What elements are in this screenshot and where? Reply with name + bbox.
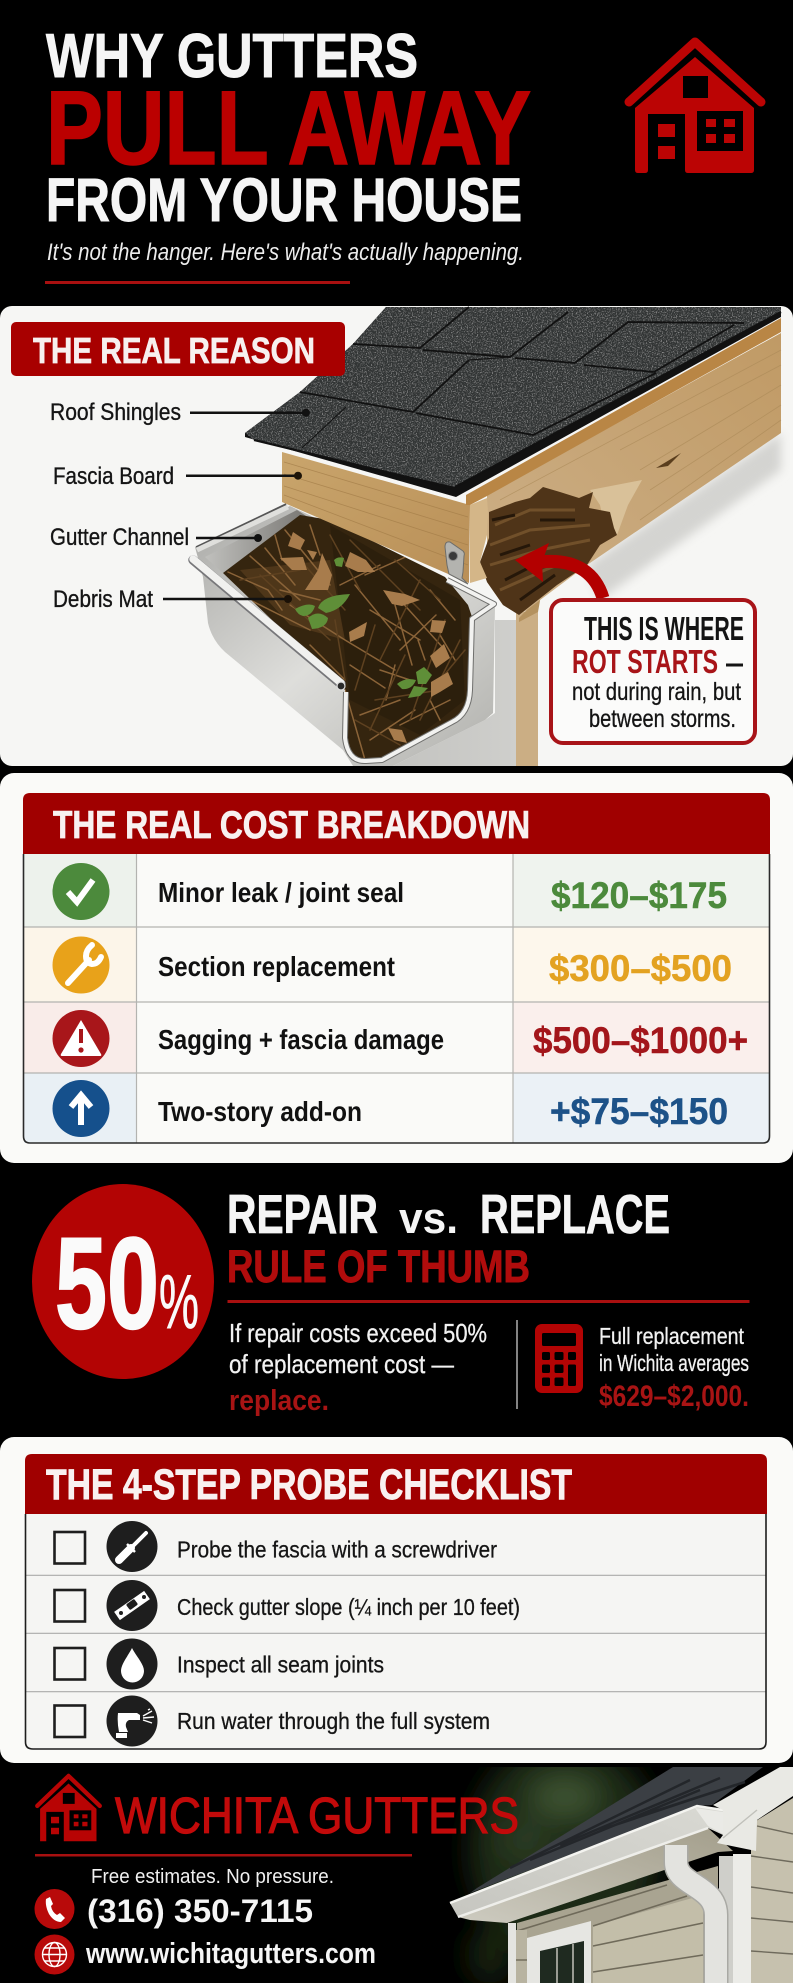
icon: phone [34, 1889, 74, 1929]
accent rule [228, 1300, 750, 1303]
table heading [23, 793, 770, 854]
header panel [45, 22, 761, 284]
end profile [345, 580, 494, 761]
icon: water drop [106, 1638, 158, 1690]
row: minor leak [52, 863, 727, 920]
tagline: Free estimates. No pressure. [91, 1866, 334, 1888]
brand name: WICHITA GUTTERS [115, 1787, 519, 1844]
end grain [470, 498, 488, 583]
callout: ROT STARTS [572, 643, 718, 680]
heading: the real reason: THE REAL REASON [33, 330, 315, 371]
heading: repair vs replace [227, 1184, 670, 1245]
panel: cost breakdown [0, 773, 793, 1163]
footer [34, 1767, 793, 1983]
icon: calculator [535, 1324, 583, 1393]
right siding [751, 1798, 793, 1983]
post [508, 1923, 516, 1983]
label: debris mat [53, 586, 292, 613]
wall shadow [587, 433, 781, 600]
soffit [458, 1828, 733, 1923]
wall and post [393, 595, 541, 766]
panel: the real reason [0, 306, 793, 766]
heading: the real reason [11, 322, 345, 376]
illustration: roof shingles [245, 307, 781, 497]
panel: probe checklist [0, 1437, 793, 1763]
red arrow [515, 543, 603, 598]
row: two-story: Two-story add-on [158, 1096, 362, 1127]
replacement cost text: $629–$2,000. [599, 1380, 749, 1413]
tagline: It's not the hanger. Here's what's actually happening. [47, 239, 524, 266]
label: fascia board: Fascia Board [53, 463, 174, 490]
accent rule [35, 1854, 412, 1856]
illustration: fascia board [282, 318, 781, 615]
leaves [295, 557, 432, 698]
photo: house with gutter [450, 1767, 793, 1983]
row: sagging: $500–$1000+ [533, 1020, 748, 1061]
labels [50, 399, 310, 613]
roof [470, 1767, 763, 1893]
bracket [445, 542, 468, 584]
step 1 [54, 1521, 497, 1572]
title [46, 22, 531, 235]
row: sagging: Sagging + fascia damage [158, 1024, 444, 1055]
panel: repair vs replace [32, 1184, 750, 1417]
icon: warning [52, 1010, 110, 1067]
label: gutter channel: Gutter Channel [50, 524, 189, 551]
back rim [197, 506, 287, 549]
logo: house [37, 1776, 100, 1841]
heading: repair vs replace: vs. [399, 1194, 458, 1243]
title: WHY GUTTERS [46, 22, 418, 91]
step 3: Inspect all seam joints [177, 1652, 384, 1678]
badge: 50 percent: % [159, 1260, 199, 1345]
icon: red house [629, 42, 761, 173]
badge: 50 percent [32, 1184, 214, 1379]
top strip [466, 318, 781, 505]
label: debris mat: Debris Mat [53, 586, 153, 613]
gutter [450, 1806, 723, 1917]
icon: check [52, 863, 110, 920]
rot damage [480, 487, 617, 615]
callout [551, 600, 755, 743]
row: section replacement: $300–$500 [549, 948, 732, 989]
chipped wood [590, 480, 642, 535]
phone: (316) 350-7115 [87, 1893, 313, 1929]
step 1: Probe the fascia with a screwdriver [177, 1536, 497, 1562]
step 4: Run water through the full system [177, 1708, 490, 1734]
label: fascia board [53, 463, 302, 490]
corner trim [719, 1856, 733, 1983]
front rim [193, 560, 341, 684]
title: FROM YOUR HOUSE [46, 166, 522, 235]
replacement cost text [599, 1323, 749, 1413]
accent rule [45, 281, 350, 284]
callout: between storms. [589, 705, 736, 733]
icon: globe [34, 1934, 74, 1974]
downspout [676, 1845, 716, 1983]
step 3 [54, 1638, 384, 1690]
rule text: replace. [229, 1385, 329, 1417]
label: roof shingles [50, 399, 310, 426]
row: minor leak: Minor leak / joint seal [158, 877, 404, 908]
rule text: If repair costs exceed 50% [229, 1318, 487, 1348]
window [527, 1921, 591, 1983]
icon: screwdriver [106, 1521, 158, 1572]
table grid [26, 1514, 766, 1749]
icon: up arrow [52, 1080, 110, 1137]
step 2: Check gutter slope (¼ inch per 10 feet) [177, 1594, 520, 1620]
step 2 [54, 1580, 520, 1631]
row: section replacement: Section replacement [158, 951, 395, 982]
website: www.wichitagutters.com [85, 1938, 376, 1970]
row backgrounds [24, 854, 770, 1143]
icon: hose nozzle [106, 1696, 158, 1746]
illustration: gutter [193, 506, 495, 766]
icon: wrench [52, 936, 110, 994]
title: PULL AWAY [46, 70, 531, 187]
label: roof shingles: Roof Shingles [50, 399, 181, 426]
row: two-story [52, 1080, 728, 1137]
rule text: of replacement cost — [229, 1349, 454, 1379]
row: minor leak: $120–$175 [551, 875, 727, 916]
rule text [229, 1318, 487, 1417]
table heading: THE 4-STEP PROBE CHECKLIST [46, 1461, 572, 1509]
row: sagging [52, 1010, 748, 1067]
replacement cost text: Full replacement [599, 1323, 745, 1349]
siding [517, 1866, 718, 1983]
heading: repair vs replace: REPLACE [480, 1184, 670, 1245]
row: section replacement [52, 936, 732, 994]
debris mat [223, 515, 472, 760]
callout: — [726, 647, 743, 680]
step 4 [54, 1696, 490, 1746]
badge: 50 percent: 50 [55, 1210, 159, 1356]
row: two-story: +$75–$150 [550, 1091, 728, 1132]
subheading: rule of thumb: RULE OF THUMB [227, 1241, 530, 1292]
table grid [23, 854, 770, 1143]
table heading: THE REAL COST BREAKDOWN [53, 804, 530, 847]
website [34, 1934, 376, 1974]
heading: repair vs replace: REPAIR [227, 1184, 378, 1245]
icon: level [106, 1580, 158, 1631]
gable rake [713, 1767, 793, 1851]
callout: not during rain, but [572, 678, 741, 706]
foliage [468, 1740, 660, 1983]
